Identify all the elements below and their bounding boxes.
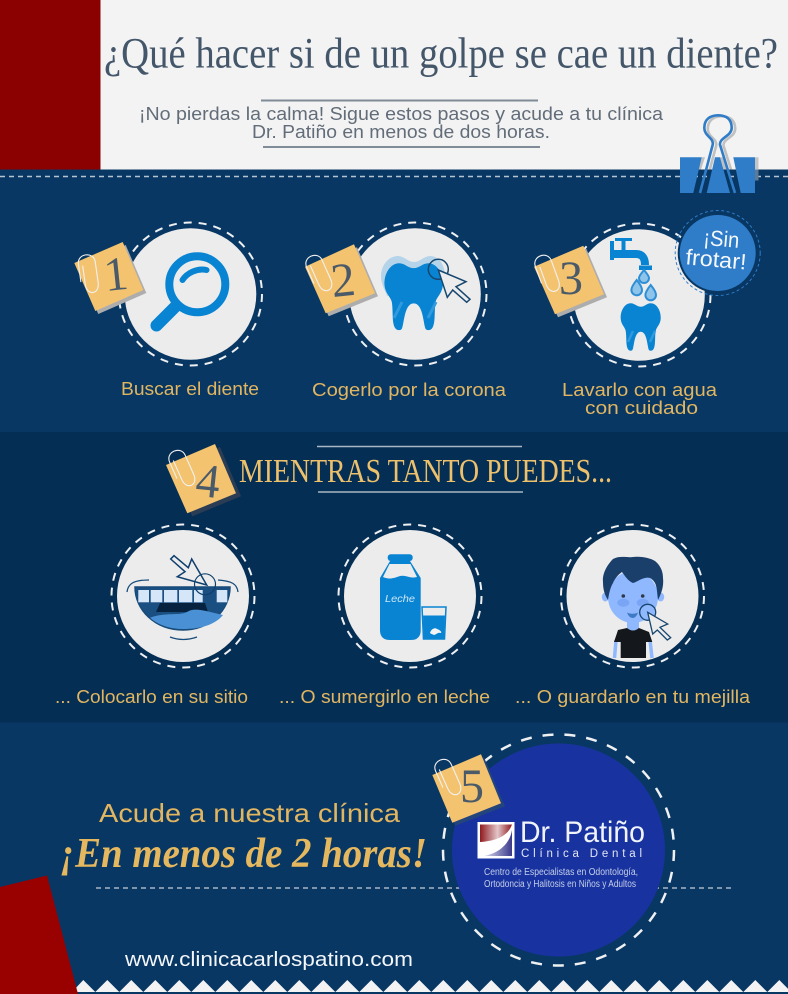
circle background [117,530,249,662]
label: Lavarlo con agua [562,380,718,400]
dashed ring [443,734,674,966]
dashed ring [119,222,262,366]
sticky note 3 [533,246,607,317]
dashed ring [344,222,486,366]
icon: boy [602,557,664,658]
subtitle: Dr. Patiño en menos de dos horas. [252,122,550,142]
label [562,380,718,418]
label: Cogerlo por la corona [312,380,507,400]
icon: water tap [610,238,652,270]
label: ... O sumergirlo en leche [279,687,490,707]
icon: water drops [631,270,656,300]
website url: www.clinicacarlospatino.com [124,949,413,971]
icon: magnifier [156,256,225,326]
red corner block [0,0,100,170]
clinic description: Ortodoncia y Halitosis en Niños y Adultos [484,879,636,890]
panel: header [0,0,788,170]
dashed ring [561,524,704,668]
dashed ring [112,524,254,668]
circle background [452,744,665,956]
circle background [349,228,481,360]
icon: tooth [621,303,661,351]
circle background [566,530,698,662]
icon: glass of milk [422,607,446,639]
badge: sin frotar [675,210,760,296]
red corner shape [0,876,78,994]
circle background [125,228,256,360]
step 3: wash [533,210,760,418]
circle background [573,229,705,361]
icon: mouth [127,580,238,640]
logo [478,822,514,858]
sticky note 1: 1 [101,247,131,302]
step 5: clinic badge [432,734,674,966]
step 1: search [74,222,262,399]
sticky note 5 [432,754,505,826]
callout: go to clinic: Acude a nuestra clínica [99,798,401,828]
sticky note 5: 5 [460,760,484,813]
label: Buscar el diente [121,379,259,399]
badge: sin frotar: frotar! [685,244,748,275]
label: ... Colocarlo en su sitio [55,687,248,707]
step 5: clinic badge: Clínica Dental [521,848,642,860]
subtitle [139,100,664,147]
heading: mientras tanto: MIENTRAS TANTO PUEDES... [239,453,612,490]
dashed ring [338,524,482,668]
label: con cuidado [585,398,698,418]
icon: cursor [428,259,470,302]
clinic description: Centro de Especialistas en Odontología, [484,867,638,878]
panel: meanwhile band [0,432,788,722]
icon: tooth [381,256,445,330]
sticky note 1 [74,242,146,314]
item: keep in cheek [515,524,751,707]
sticky note 4: 4 [193,454,223,509]
subtitle: ¡No pierdas la calma! Sigue estos pasos y acude a tu clínica [139,104,664,124]
icon: binder clip [680,115,758,193]
icon: milk bottle [380,554,421,640]
label: ... O guardarlo en tu mejilla [515,687,751,707]
icon: milk bottle: Leche [385,594,415,605]
callout: go to clinic [60,798,427,877]
zigzag footer [72,980,788,992]
sticky note 2 [303,244,378,316]
item: submerge in milk [279,524,490,707]
sticky note 3: 3 [559,252,583,305]
icon: cursor [640,604,671,640]
item: put back in place [55,524,254,707]
clinic description [484,867,638,890]
clinic name: Dr. Patiño [520,816,645,849]
badge: sin frotar: ¡Sin [702,225,740,253]
circle background [344,530,476,662]
icon: arrow [171,556,216,595]
sticky note 4 [166,444,241,516]
callout: go to clinic: ¡En menos de 2 horas! [60,831,427,877]
dashed ring [568,224,710,366]
sticky note 2: 2 [328,253,358,308]
step 2: hold by crown [303,222,507,400]
